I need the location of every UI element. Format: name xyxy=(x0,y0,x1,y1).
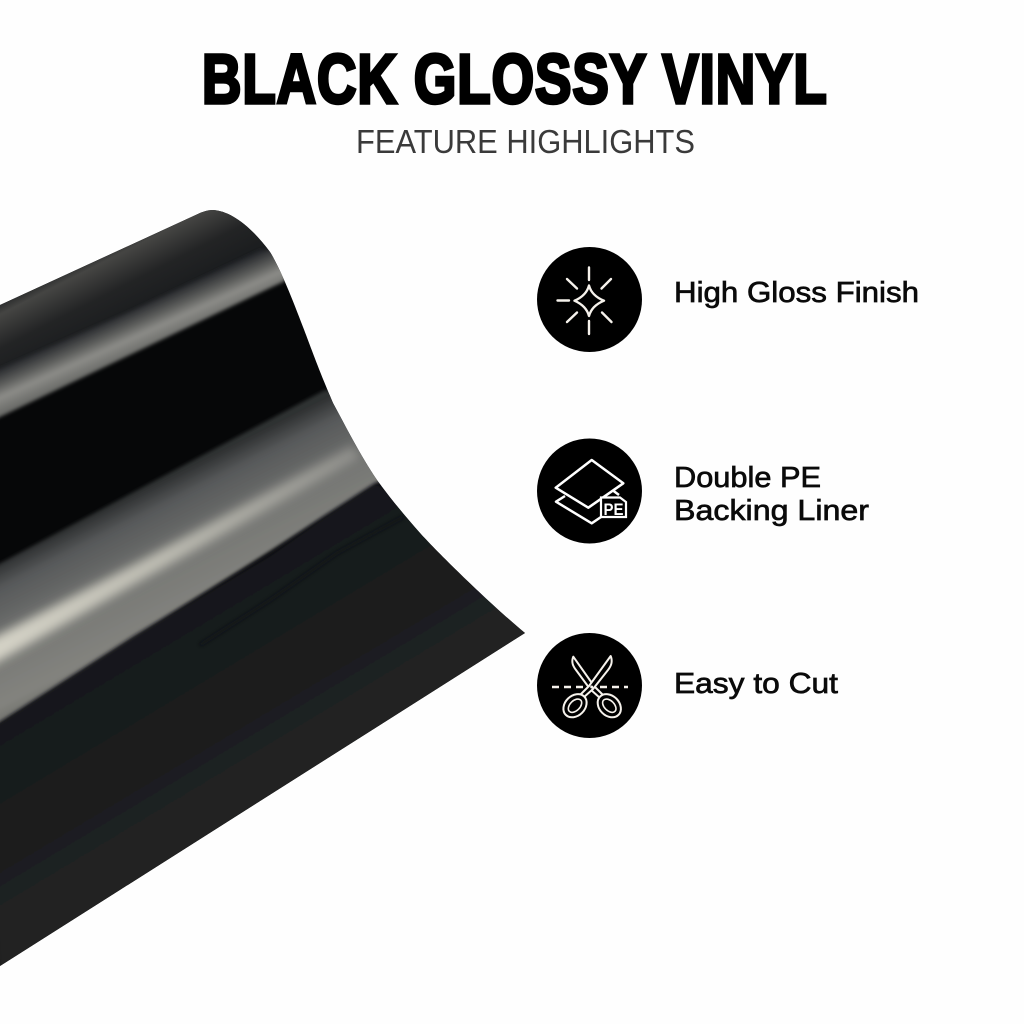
label: Easy to Cut xyxy=(674,668,838,700)
vinyl sheet xyxy=(0,200,540,990)
icon: sparkle xyxy=(537,247,642,352)
label line 2: Backing Liner xyxy=(674,495,869,527)
label: Double PE xyxy=(674,462,821,494)
title: BLACK GLOSSY VINYL xyxy=(202,41,827,119)
icon: layers with pe tag: PE xyxy=(604,500,624,519)
subtitle: FEATURE HIGHLIGHTS xyxy=(356,123,695,160)
label: High Gloss Finish xyxy=(674,277,919,309)
feature: high gloss finish xyxy=(537,247,919,352)
feature: double pe backing liner xyxy=(537,438,869,544)
feature: easy to cut xyxy=(537,633,838,738)
icon: layers with pe tag xyxy=(537,438,642,544)
icon: scissors xyxy=(537,633,642,738)
